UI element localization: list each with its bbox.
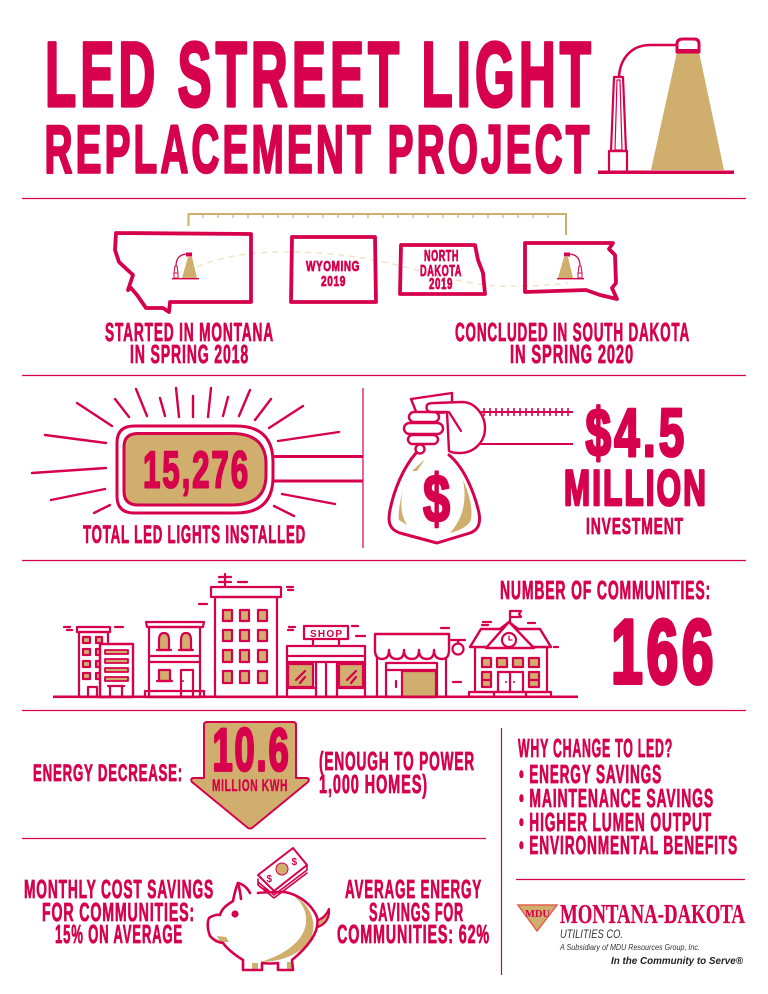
timeline bracket bbox=[188, 214, 566, 235]
building: shop bbox=[287, 626, 365, 697]
caption: start: STARTED IN MONTANA bbox=[105, 317, 274, 347]
building: tower bbox=[199, 574, 293, 697]
logo: Montana-Dakota Utilities: MDU bbox=[525, 908, 550, 920]
label: energy decrease: ENERGY DECREASE: bbox=[33, 760, 183, 787]
investment amount: INVESTMENT bbox=[586, 513, 684, 539]
icon: glowing lamp with count bbox=[32, 388, 362, 516]
text: enough to power: (ENOUGH TO POWER bbox=[319, 746, 475, 776]
logo: Montana-Dakota Utilities: A Subsidiary of MDU Resources Group, Inc. bbox=[559, 942, 700, 952]
icon: piggy bank with cash bbox=[208, 848, 329, 970]
logo: Montana-Dakota Utilities: In the Community to Serve® bbox=[611, 956, 744, 967]
illustration: town skyline bbox=[53, 574, 578, 698]
caption: start: IN SPRING 2018 bbox=[130, 339, 249, 369]
investment amount bbox=[564, 395, 708, 539]
logo: Montana-Dakota Utilities: UTILITIES CO. bbox=[560, 929, 623, 941]
icon: hand holding money bag bbox=[389, 393, 573, 543]
building: brick house bbox=[145, 622, 204, 697]
route dashed line bbox=[197, 252, 568, 286]
text: average energy savings: SAVINGS FOR bbox=[369, 897, 464, 927]
state: North Dakota: DAKOTA bbox=[420, 263, 462, 280]
icon: piggy bank with cash: $ bbox=[292, 857, 298, 868]
text: monthly cost savings: 15% ON AVERAGE bbox=[55, 919, 183, 949]
building: office pair bbox=[64, 627, 133, 697]
state: Wyoming bbox=[291, 237, 376, 302]
building: market bbox=[375, 628, 465, 697]
icon: piggy bank with cash: $ bbox=[266, 874, 272, 885]
text: enough to power: 1,000 HOMES) bbox=[319, 769, 428, 799]
text: monthly cost savings: MONTHLY COST SAVINGS bbox=[24, 874, 214, 904]
state: Montana bbox=[115, 233, 251, 312]
icon: street lamp bbox=[598, 39, 734, 174]
arrow: energy figure bbox=[191, 716, 309, 828]
text: monthly cost savings bbox=[24, 874, 214, 949]
icon: hand holding money bag: $ bbox=[423, 461, 453, 537]
state: North Dakota: NORTH bbox=[424, 248, 459, 265]
text: monthly cost savings: FOR COMMUNITIES: bbox=[42, 897, 195, 927]
caption: start bbox=[105, 317, 274, 369]
state: Wyoming: WYOMING bbox=[306, 258, 360, 275]
icon: glowing lamp with count: 15,276 bbox=[143, 442, 250, 500]
state: South Dakota bbox=[525, 243, 617, 299]
text: average energy savings: AVERAGE ENERGY bbox=[345, 874, 482, 904]
building: school bbox=[469, 611, 558, 697]
text: average energy savings: COMMUNITIES: 62% bbox=[337, 919, 490, 949]
title bbox=[44, 24, 595, 188]
logo: Montana-Dakota Utilities bbox=[518, 899, 745, 967]
arrow: energy figure: MILLION KWH bbox=[212, 777, 288, 795]
investment amount: $4.5 bbox=[586, 395, 688, 471]
state: North Dakota bbox=[400, 245, 485, 294]
text: average energy savings bbox=[337, 874, 490, 949]
building: shop: SHOP bbox=[310, 629, 342, 640]
label: total lights: TOTAL LED LIGHTS INSTALLED bbox=[83, 521, 306, 549]
text: enough to power bbox=[319, 746, 475, 799]
state: Wyoming: 2019 bbox=[321, 273, 346, 290]
caption: end: IN SPRING 2020 bbox=[510, 339, 634, 369]
state: North Dakota: 2019 bbox=[429, 276, 453, 293]
caption: end bbox=[455, 317, 690, 369]
list: why change to LED bbox=[518, 733, 738, 860]
arrow: energy figure: 10.6 bbox=[212, 716, 290, 784]
